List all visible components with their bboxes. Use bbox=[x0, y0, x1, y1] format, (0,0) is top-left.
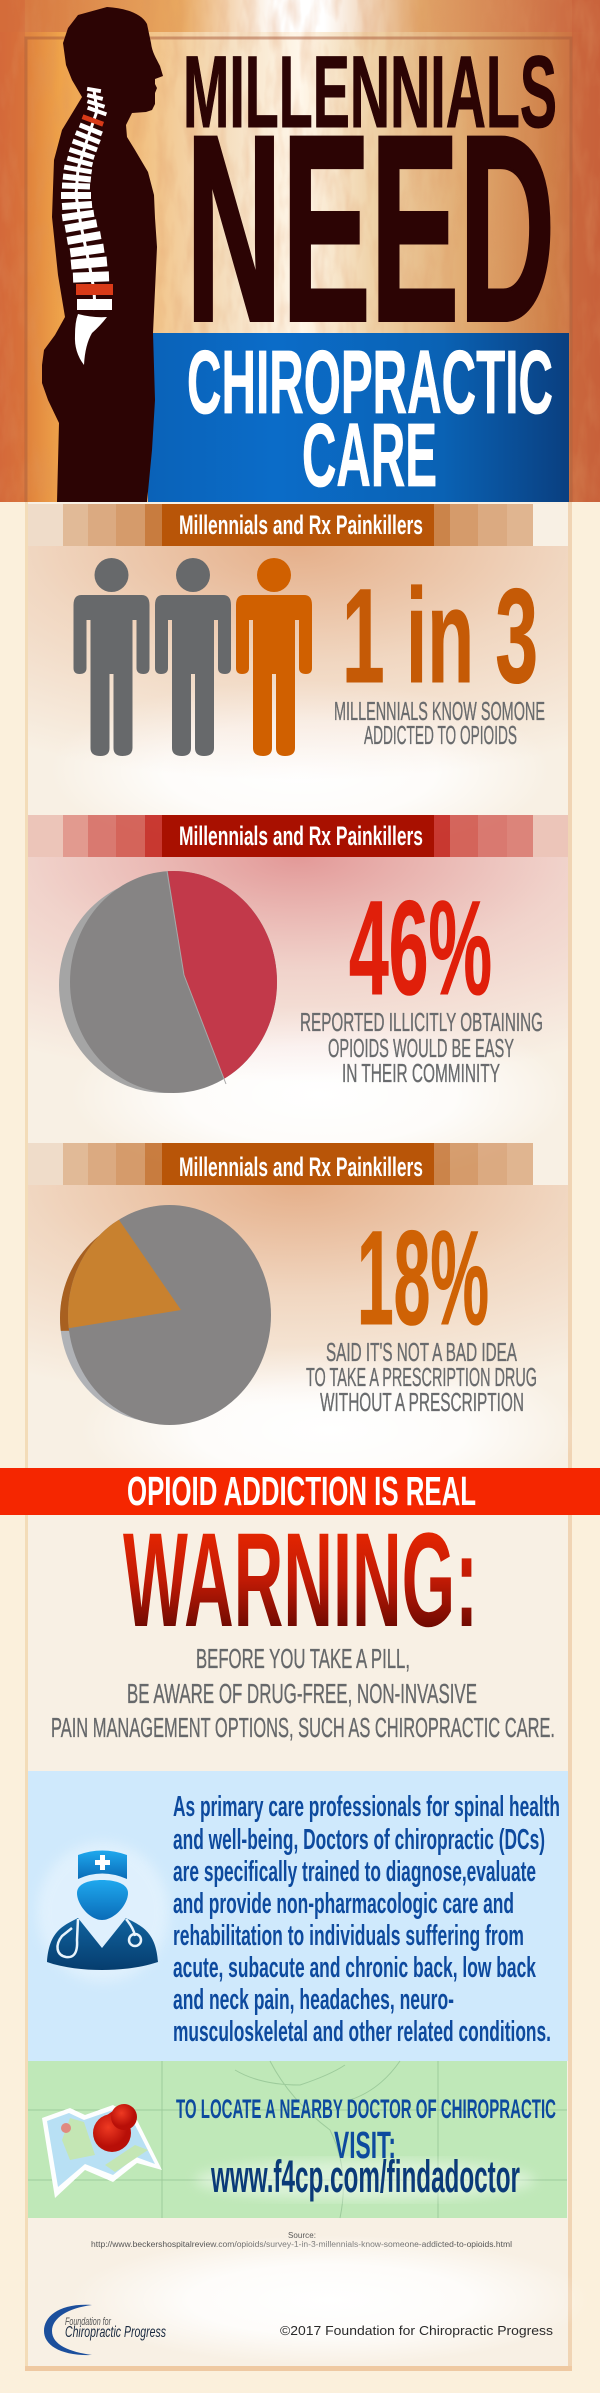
panel background bbox=[28, 1185, 580, 1515]
panel background bbox=[28, 857, 570, 1185]
body text bbox=[173, 1791, 560, 2048]
person grey bbox=[155, 558, 231, 756]
source: http://www.beckershospitalreview.com/opioids/survey-1-in-3-millennials-know-someone-addicted-to-opioids.html bbox=[91, 2240, 512, 2249]
caption bbox=[300, 1007, 543, 1088]
section band bbox=[28, 815, 568, 857]
person orange bbox=[236, 558, 312, 756]
silhouette with spine bbox=[42, 7, 163, 502]
logo: Foundation for bbox=[65, 2316, 112, 2328]
panel: 46% bbox=[28, 815, 568, 1143]
map lines bbox=[28, 2061, 567, 2218]
panel: 18% bbox=[28, 1143, 568, 1468]
panel: doctors of chiropractic bbox=[28, 1771, 568, 2061]
copyright: ©2017 Foundation for Chiropractic Progress bbox=[280, 2323, 554, 2338]
section band: Millennials and Rx Painkillers bbox=[179, 1152, 423, 1182]
logo bbox=[44, 2305, 166, 2355]
source bbox=[91, 2231, 512, 2249]
warning text: BEFORE YOU TAKE A PILL, bbox=[196, 1643, 410, 1674]
title: Care: CARE bbox=[302, 406, 437, 506]
panel background bbox=[28, 546, 568, 860]
pie chart 46% bbox=[59, 870, 277, 1093]
logo: Chiropractic Progress bbox=[65, 2324, 166, 2341]
section band: Millennials and Rx Painkillers bbox=[179, 510, 423, 540]
section band bbox=[28, 1143, 533, 1185]
caption bbox=[306, 1337, 537, 1417]
wood texture background bbox=[0, 0, 600, 502]
icon: three people bbox=[74, 558, 312, 756]
section band bbox=[28, 504, 533, 546]
icon: map with pin bbox=[42, 2104, 162, 2198]
spine bbox=[61, 87, 113, 365]
header banner bbox=[0, 0, 600, 506]
section band: Millennials and Rx Painkillers bbox=[179, 821, 423, 851]
blue panel bbox=[148, 333, 569, 502]
icon: doctor bbox=[37, 1842, 169, 1982]
source: Source: bbox=[288, 2231, 316, 2240]
person grey bbox=[74, 558, 150, 756]
visit text: VISIT: bbox=[334, 2125, 396, 2167]
panel: 1 in 3 bbox=[28, 504, 568, 860]
footer glow bbox=[70, 2235, 590, 2365]
url glow bbox=[195, 2160, 535, 2200]
pie chart 18% bbox=[60, 1205, 271, 1425]
panel: locate a doctor bbox=[28, 2061, 567, 2218]
warning text bbox=[51, 1643, 555, 1743]
caption bbox=[334, 696, 545, 750]
